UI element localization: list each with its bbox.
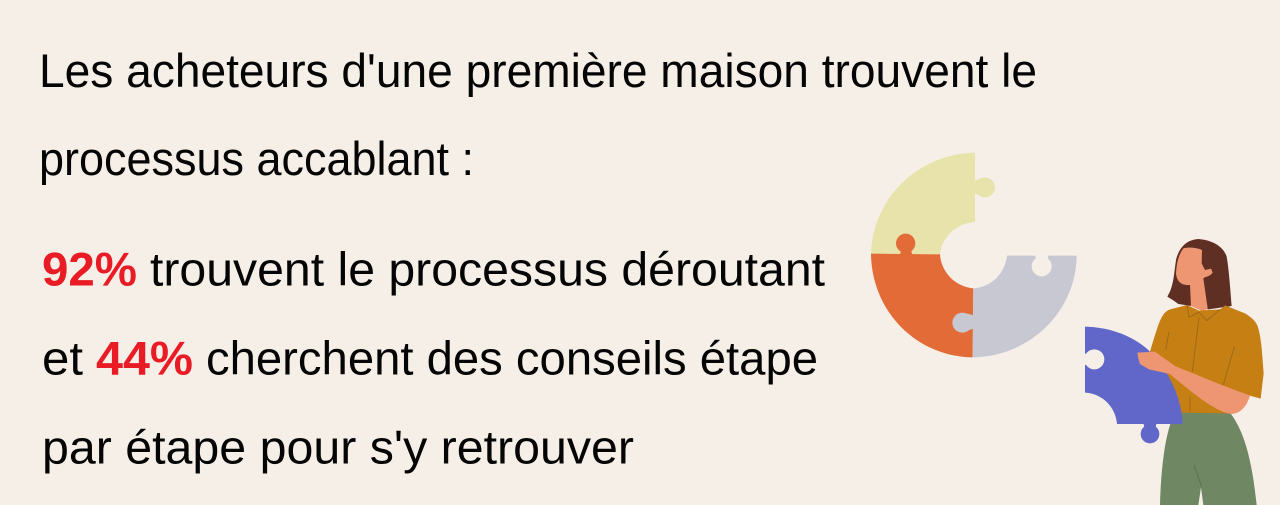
trousers [1160, 410, 1257, 505]
heading [39, 44, 1037, 185]
heading: Les acheteurs d'une première maison trouvent le [39, 44, 1037, 97]
arm and hand [1137, 352, 1250, 414]
shirt details [1166, 305, 1234, 412]
heading: processus accablant : [39, 132, 474, 185]
shirt [1150, 305, 1264, 413]
hair [1167, 239, 1232, 309]
stat: 44%: 44% [96, 332, 193, 384]
statistics text [42, 242, 825, 474]
puzzle piece: yellow [871, 153, 995, 255]
puzzle piece: blue [1084, 327, 1183, 443]
statistics text: trouvent le processus déroutant [150, 242, 825, 296]
puzzle piece: orange [871, 234, 973, 357]
statistics text: cherchent des conseils étape [206, 332, 818, 384]
puzzle donut [871, 153, 1077, 357]
woman holding puzzle piece [1084, 239, 1264, 505]
statistics text: et [42, 332, 83, 384]
notch in grey piece [1035, 255, 1049, 263]
puzzle piece: grey [952, 255, 1077, 357]
neck and face [1176, 248, 1213, 312]
notch in blue piece [1084, 353, 1090, 366]
statistics text: par étape pour s'y retrouver [42, 420, 634, 474]
stat: 92%: 92% [42, 242, 137, 296]
trouser crease [1194, 465, 1202, 487]
